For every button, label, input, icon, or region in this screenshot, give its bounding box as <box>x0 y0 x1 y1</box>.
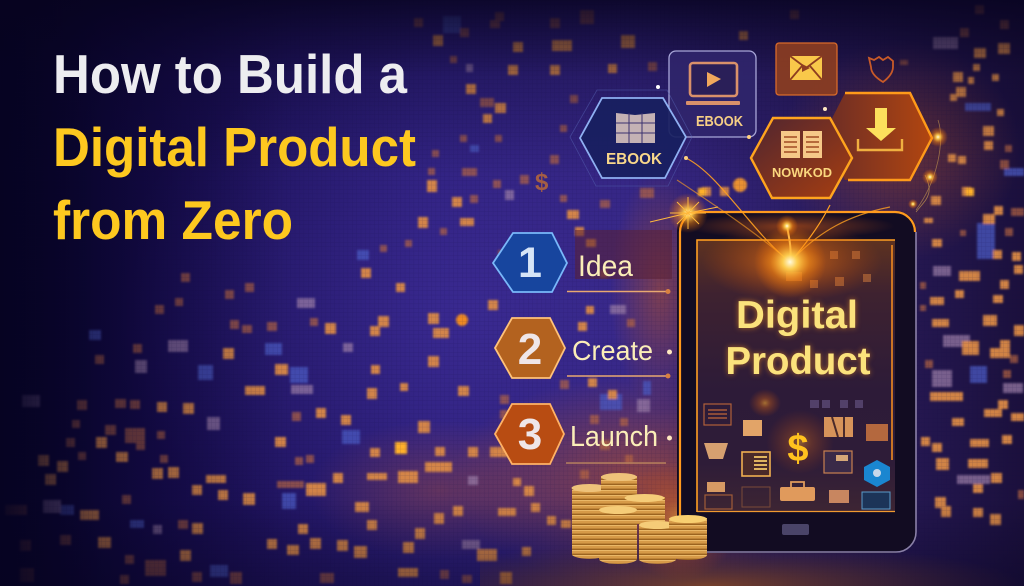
title: Digital Product <box>53 116 416 178</box>
step 1: idea: 1 <box>518 239 542 287</box>
icon: shield outline <box>869 57 893 82</box>
screen label: Product <box>726 340 871 383</box>
screen icons: $ <box>787 428 809 470</box>
tablet screen <box>697 222 895 512</box>
step 2: create <box>495 318 672 378</box>
spark nodes <box>650 85 948 298</box>
step 2: create: Create <box>572 335 653 366</box>
hexagon: ebook blue: EBOOK <box>606 151 663 168</box>
hexagon: download <box>823 93 932 180</box>
title: How to Build a <box>53 43 407 105</box>
hexagon: book: NOWKOD <box>772 166 832 180</box>
floor glow <box>480 510 1024 586</box>
step panel backing: idea <box>575 230 672 279</box>
hexagon: book <box>751 118 852 198</box>
coin stacks <box>572 473 707 564</box>
hexagon: ebook blue <box>570 90 692 186</box>
card: video ebook: EBOOK <box>696 114 743 130</box>
step 3: launch <box>495 404 672 464</box>
step 3: launch: 3 <box>518 410 542 459</box>
faint dollar sign: $ <box>535 169 549 196</box>
screen icons <box>704 404 890 509</box>
step 2: create: 2 <box>518 325 542 374</box>
card: envelope <box>776 43 837 95</box>
step 3: launch: Launch <box>570 421 658 453</box>
tablet device <box>677 211 916 553</box>
title: from Zero <box>53 189 293 251</box>
tablet left glow <box>620 460 740 580</box>
home button <box>782 524 809 535</box>
upper icon cluster <box>570 43 932 198</box>
step 1: idea: Idea <box>578 250 633 283</box>
step 1: idea <box>493 233 670 294</box>
card: video ebook <box>669 51 756 137</box>
connection lines <box>677 120 941 262</box>
bezel warm top edge <box>685 213 895 239</box>
screen label: Digital <box>736 294 858 337</box>
title <box>53 43 416 251</box>
screen label <box>726 294 871 383</box>
